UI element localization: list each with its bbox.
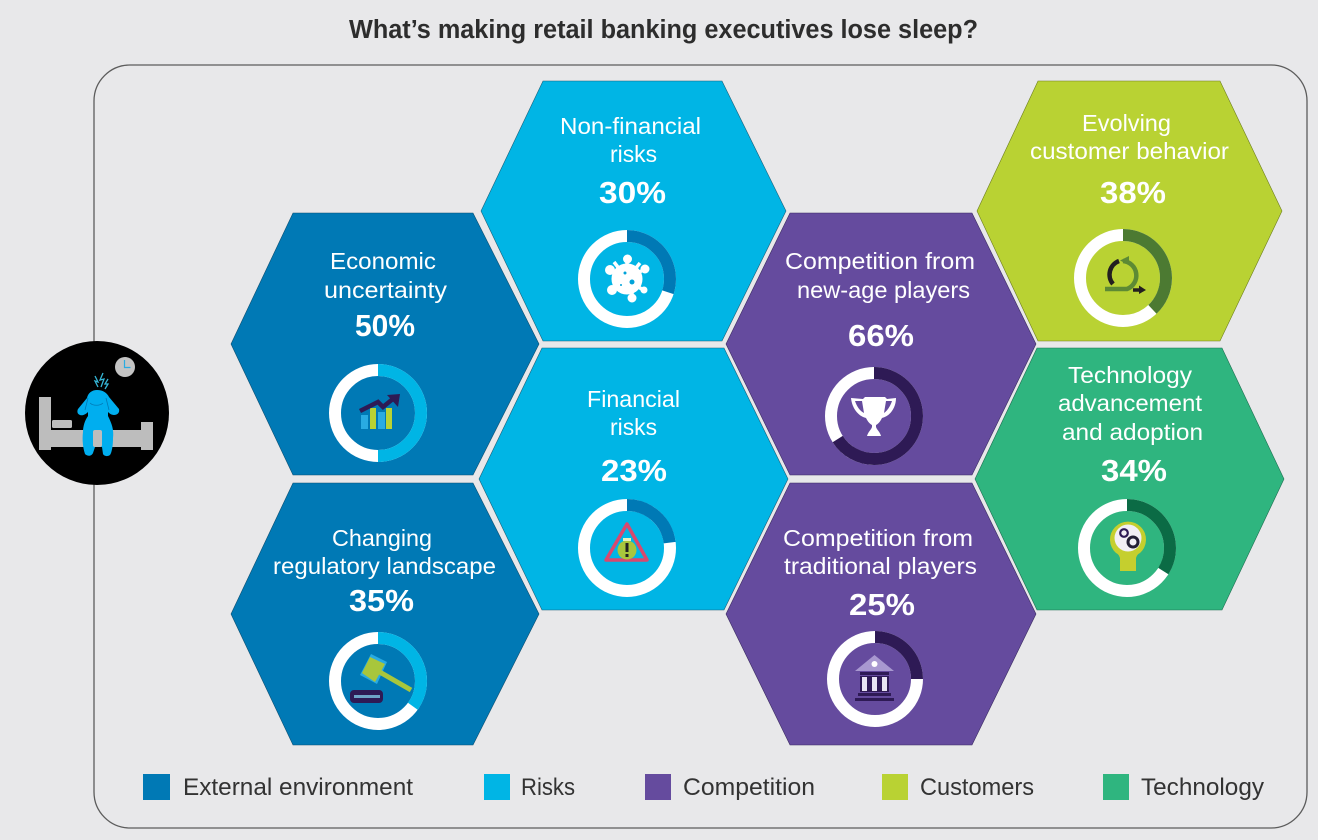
panel: Economic uncertainty: uncertainty [324,277,447,303]
panel: Competition from new-age players: new-age players [797,277,970,303]
title: What’s making retail banking executives lose sleep? [349,16,978,44]
icon: virus [606,255,649,302]
panel: Non-financial risks: 30% [599,175,666,210]
panel: Competition from new-age players [726,213,1036,475]
icon: light bulb with gears [1110,522,1146,571]
icon: bank building [855,655,894,701]
panel: Evolving customer behavior: 38% [1100,175,1166,210]
panel: Financial risks: 23% [601,453,667,488]
panel: Competition from traditional players: traditional players [784,553,977,579]
panel: Economic uncertainty: Economic [330,248,436,274]
legend item: Technology: Technology [1141,774,1264,801]
panel: Technology advancement and adoption: Technology [1068,362,1192,388]
icon: trophy [851,397,896,436]
panel: Non-financial risks: Non-financial [560,113,701,139]
icon: loop arrow [1105,256,1146,294]
panel: Changing regulatory landscape: regulatory landscape [273,553,496,579]
panel: Competition from new-age players: Competition from [785,248,975,274]
panel: Competition from traditional players: 25% [849,587,915,622]
panel: Financial risks: Financial [587,386,680,412]
panel: Technology advancement and adoption: 34% [1101,453,1167,488]
panel: Financial risks: risks [610,414,657,440]
panel: Evolving customer behavior [977,81,1282,341]
panel: Evolving customer behavior: Evolving [1082,110,1171,136]
panel: Non-financial risks [481,81,786,341]
panel: Competition from new-age players: 66% [848,318,914,353]
panel: Technology advancement and adoption: and adoption [1062,419,1203,445]
legend item: Customers: Customers [920,774,1034,801]
panel: Competition from traditional players [726,483,1036,745]
panel: Evolving customer behavior: customer behavior [1030,138,1229,164]
panel: Financial risks [479,348,788,610]
legend item: Risks: Risks [521,774,575,801]
panel: Changing regulatory landscape [231,483,539,745]
panel: Economic uncertainty: 50% [355,308,415,343]
panel: Changing regulatory landscape: Changing [332,525,432,551]
panel: Economic uncertainty [231,213,539,475]
icon: gavel [350,654,411,703]
panel: Competition from traditional players: Competition from [783,525,973,551]
legend item: Risks [484,774,575,801]
icon: rising bar chart [360,394,400,429]
panel: Technology advancement and adoption: advancement [1058,390,1202,416]
legend item: External environment: External environment [183,774,413,801]
icon: sleepless person on bed [25,341,169,485]
legend [143,774,1264,801]
panel: Technology advancement and adoption [975,348,1284,610]
panel: Changing regulatory landscape: 35% [349,583,414,618]
panel: Non-financial risks: risks [610,141,657,167]
icon: warning triangle [606,524,647,560]
legend item: Competition: Competition [683,774,815,801]
